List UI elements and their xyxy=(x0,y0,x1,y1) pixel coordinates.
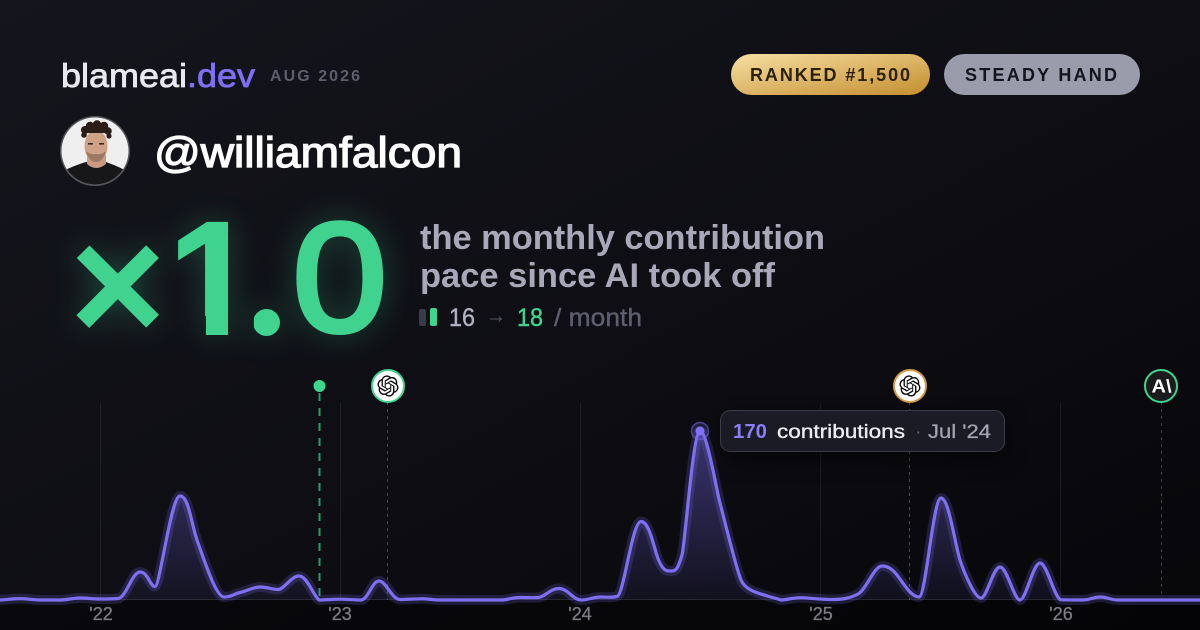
pace comparison xyxy=(419,302,642,332)
badge: steady hand xyxy=(944,54,1140,95)
tooltip: · xyxy=(915,421,922,443)
year labels: '26 xyxy=(1049,604,1073,624)
marker line: OpenAI gold xyxy=(908,402,910,600)
pace comparison: → xyxy=(486,302,506,329)
pace comparison: 16 xyxy=(449,304,475,332)
icon: OpenAI with green ring xyxy=(372,370,404,402)
description xyxy=(420,219,825,295)
year labels xyxy=(89,604,1073,624)
wordmark: blameai.dev: .dev xyxy=(187,58,255,95)
year labels: '24 xyxy=(568,604,592,624)
badge: steady hand: STEADY HAND xyxy=(965,65,1117,85)
big multiplier: ×1.0: . xyxy=(241,165,294,377)
pace comparison: 18 xyxy=(517,304,543,332)
peak marker xyxy=(692,422,708,440)
badge: rank: RANKED #1,500 xyxy=(750,65,910,85)
big multiplier: ×1.0: 1 xyxy=(168,187,259,370)
axis band xyxy=(0,600,1200,630)
big multiplier: ×1.0: × xyxy=(70,192,166,376)
year labels: '22 xyxy=(89,604,113,624)
contribution line xyxy=(0,431,1200,600)
big multiplier: ×1.0 xyxy=(72,207,398,348)
marker line: OpenAI early xyxy=(386,402,388,600)
big multiplier: ×1.0: 0 xyxy=(292,192,387,364)
tooltip xyxy=(720,410,1004,458)
date label: AUG 2026 xyxy=(270,68,360,85)
line halo xyxy=(0,431,1200,600)
tooltip: Jul '24 xyxy=(928,422,992,443)
tooltip: contributions xyxy=(777,422,905,443)
avatar xyxy=(60,116,132,190)
wordmark: blameai.dev: blameai xyxy=(61,58,187,95)
icon: Anthropic xyxy=(1145,370,1177,402)
mini bars xyxy=(419,308,437,326)
tooltip: 170 xyxy=(733,421,767,443)
year grid lines xyxy=(100,403,1060,600)
description: the monthly contribution xyxy=(420,219,825,257)
area fill xyxy=(0,431,1200,600)
badge: rank xyxy=(731,54,930,95)
year labels: '25 xyxy=(809,604,833,624)
big multiplier: ×1.0: × xyxy=(70,192,166,376)
year labels: '23 xyxy=(328,604,352,624)
wordmark: blameai.dev xyxy=(61,58,255,95)
username: @williamfalcon xyxy=(154,129,462,177)
AI start marker xyxy=(314,380,326,600)
description: pace since AI took off xyxy=(420,257,776,295)
chart xyxy=(0,370,1200,624)
big multiplier: ×1.0: 0 xyxy=(292,192,387,364)
baseline xyxy=(0,598,1200,600)
marker line: Anthropic xyxy=(1160,402,1162,600)
big multiplier: ×1.0: 1 xyxy=(168,187,259,370)
icon: Anthropic: A\ xyxy=(1152,376,1172,396)
icon: OpenAI with gold ring xyxy=(894,370,926,402)
pace comparison: / month xyxy=(554,304,642,332)
